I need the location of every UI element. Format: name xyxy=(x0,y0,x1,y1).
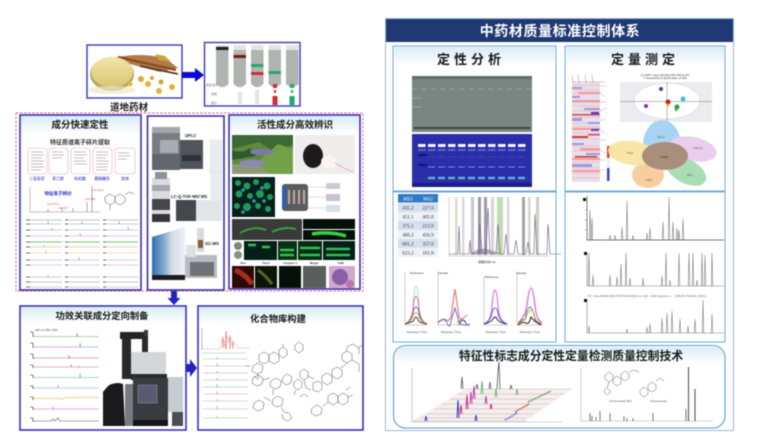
chart: five-petal Venn diagram: CRC xyxy=(646,178,653,182)
labels: stain channels: Flex1 xyxy=(262,261,270,265)
table: MS1 MS2 xyxy=(398,194,438,257)
heading: qualitative analysis: 定性分析 xyxy=(437,52,505,67)
title: 中药材质量标准控制体系 xyxy=(480,23,640,39)
panel: targeted preparation: 280 nm MS1 1064 xyxy=(35,328,58,332)
chart: four reference and sample peaks: Sample xyxy=(438,271,449,275)
photo: zebrafish xyxy=(232,135,293,174)
compound class labels: 有机酸 xyxy=(74,176,86,181)
labels: stain channels xyxy=(240,261,344,265)
chart: four reference and sample peaks xyxy=(405,271,543,326)
photo: mice xyxy=(295,135,355,174)
table: MS1 MS2: 405.0 xyxy=(422,216,434,220)
panel: column separation steps: 洗脱 xyxy=(211,91,217,96)
panel: column separation steps: 组分 xyxy=(211,100,217,105)
chart: PCA score plot: LC-MS7 nano QII-ESI-MS-OPLS-DA xyxy=(641,73,689,77)
chart: heatmap xyxy=(572,75,610,182)
image: cell fluorescence xyxy=(232,177,275,217)
images: tissue sections xyxy=(232,266,355,288)
chart: characteristic ion identification: m/z 611.2 xyxy=(92,188,105,192)
panel: column separation steps xyxy=(204,42,300,106)
table: MS1 MS2: 486.2 xyxy=(402,234,414,238)
compound class labels xyxy=(29,176,129,181)
panel: characteristic marker QC technology xyxy=(394,346,725,428)
chart: five-petal Venn diagram xyxy=(607,120,719,192)
chart: compound chromatograms xyxy=(202,328,250,418)
table: MS1 MS2: 451.1 xyxy=(402,216,414,220)
subheading: fragment extraction: 特征质谱离子碎片提取 xyxy=(50,138,110,146)
five dashed fragment boxes xyxy=(28,148,135,174)
image: TLC plate fluorescence xyxy=(412,134,532,187)
chart: MRM overlay: 保留时间/min xyxy=(478,259,496,264)
table: MS1 MS2: 375.1 xyxy=(402,224,414,230)
table: MS1 MS2: 227.0 xyxy=(422,206,434,212)
labels: stain channels: Flex xyxy=(240,261,246,265)
instrument: UPLC: UPLC xyxy=(185,133,196,138)
instrument: GC-MS: GC-MS xyxy=(205,241,219,246)
chart: chromatogram one xyxy=(585,196,724,240)
chemical structures xyxy=(246,342,362,421)
chart: five-petal Venn diagram: SCLC xyxy=(657,135,666,139)
image: TLC plate daylight xyxy=(412,76,532,132)
heading: QC technology: 特征性标志成分定性定量检测质量控制技术 xyxy=(459,349,683,363)
chart: mass spectrum with structures: Ginsenoside Rb1 xyxy=(609,399,632,403)
labels: stain channels: Caspase 3 xyxy=(283,261,297,265)
instrument: LC-Q-TOF-MS: LC-Q-TOF-MS/ MS xyxy=(171,194,207,199)
compound class labels: 黄酮糖苷 xyxy=(94,176,110,181)
table: MS1 MS2: 456.9 xyxy=(422,234,434,238)
chart: characteristic ion identification: m/z 317 xyxy=(58,206,68,210)
chromatogram caption: TIC: Scan BASELINE POSITIVE MODE m/z 100 - 1000 Segment 1 ... 1000 80 750 ESI+ 2000.0 xyxy=(587,294,707,298)
heading: rapid identification: 成分快速定性 xyxy=(51,119,109,131)
chart: chromatogram three xyxy=(587,299,724,333)
panel: qualitative analysis lower xyxy=(393,192,561,342)
chart: characteristic ion identification: 特征离子辨识 xyxy=(44,190,72,197)
small data lines in boxes xyxy=(31,152,130,170)
panel: dashed pink frame xyxy=(16,113,363,291)
chart: mass spectrum with structures xyxy=(581,367,713,421)
panel: authentic herb photo xyxy=(87,45,182,98)
panel: qualitative analysis lower: Retention Time xyxy=(486,330,506,334)
title bar xyxy=(386,19,733,42)
chart: five-petal Venn diagram: 10286 xyxy=(660,155,669,159)
table: MS1 MS2: 623.2 xyxy=(402,252,414,256)
heading: active components: 活性成分高效辨识 xyxy=(257,119,333,131)
table: MS1 MS2: 435.2 xyxy=(402,206,414,212)
compound class labels: 三萜皂苷 xyxy=(29,176,45,181)
chart: mass spectrum with structures: Ginsenoside xyxy=(650,399,667,403)
arrow: down xyxy=(168,291,180,305)
chart: characteristic ion identification: m/z 433 xyxy=(85,197,95,201)
heading: targeted preparation: 功效关联成分定向制备 xyxy=(56,310,149,321)
chart: five-petal Venn diagram: NSCLC xyxy=(693,146,704,150)
image: fluorescence strips xyxy=(232,219,355,260)
heading: compound library: 化合物库构建 xyxy=(250,313,306,324)
table: MS1 MS2: 213.9 xyxy=(422,224,434,230)
panel: instruments xyxy=(148,116,224,290)
panel: targeted preparation xyxy=(20,306,186,430)
panel: quantitative chromatograms xyxy=(565,192,725,342)
arrow: to compound library xyxy=(186,359,197,377)
panel: qualitative analysis lower: Retention Time xyxy=(520,330,540,334)
table: MS1 MS2: MS1 xyxy=(403,198,413,202)
chart: four reference and sample peaks: Reference xyxy=(410,271,424,275)
chart: four reference and sample peaks: Sample xyxy=(516,271,527,275)
panel: rapid component identification xyxy=(20,115,141,290)
heading: quantitative determination: 定量测定 xyxy=(611,52,679,67)
arrow: herb to columns xyxy=(182,68,204,82)
chart: characteristic ion identification xyxy=(30,186,134,212)
panel: qualitative analysis lower: Retention Time xyxy=(441,330,461,334)
chart: stacked ion chromatograms xyxy=(26,220,138,287)
chart: PCA score plot xyxy=(620,73,712,122)
panel: quality standard control system xyxy=(386,18,734,430)
labels: stain channels: Merge xyxy=(310,261,319,265)
compound class labels: 其他 xyxy=(121,176,129,181)
chart: chromatogram two xyxy=(587,252,724,286)
panel: column separation steps: 收集组分 xyxy=(206,82,218,87)
table: MS1 MS2: 161.0 xyxy=(422,252,434,256)
instrument: GC-MS xyxy=(152,227,219,280)
compound class labels: 苯乙醇 xyxy=(52,176,64,181)
panel: active component identification xyxy=(229,115,360,289)
chart: PCA score plot: T-Scores/[1] & t[2]/Scatter of DM xyxy=(643,76,687,80)
panel: qualitative analysis lower: Retention Time xyxy=(407,330,427,334)
image: tube plate and tissue diagrams xyxy=(282,183,340,212)
instrument: UPLC xyxy=(152,127,222,173)
panel: qualitative analysis xyxy=(393,46,556,191)
photo: preparative instrument xyxy=(103,330,183,426)
chart: five-petal Venn diagram: BCa xyxy=(687,173,693,177)
table: MS1 MS2: MS2 xyxy=(423,198,433,202)
panel: compound library xyxy=(198,306,363,430)
label: authentic herbs: 道地药材 xyxy=(110,102,148,114)
instrument: LC-Q-TOF-MS xyxy=(152,172,222,222)
chart: 3D stacked chromatograms xyxy=(412,362,572,422)
table: MS1 MS2: 357.0 xyxy=(422,242,434,248)
chart: five-petal Venn diagram: PCa xyxy=(627,151,633,155)
chart: four reference and sample peaks: Reference xyxy=(485,275,499,279)
chart: preparation chromatograms xyxy=(30,332,99,422)
panel: quantitative determination xyxy=(565,46,725,192)
table: MS1 MS2: 681.2 xyxy=(402,242,414,248)
labels: stain channels: H&E xyxy=(338,261,344,265)
chart: MRM overlay xyxy=(449,197,561,264)
chart: characteristic ion identification: m/z 273.1 xyxy=(47,202,60,206)
